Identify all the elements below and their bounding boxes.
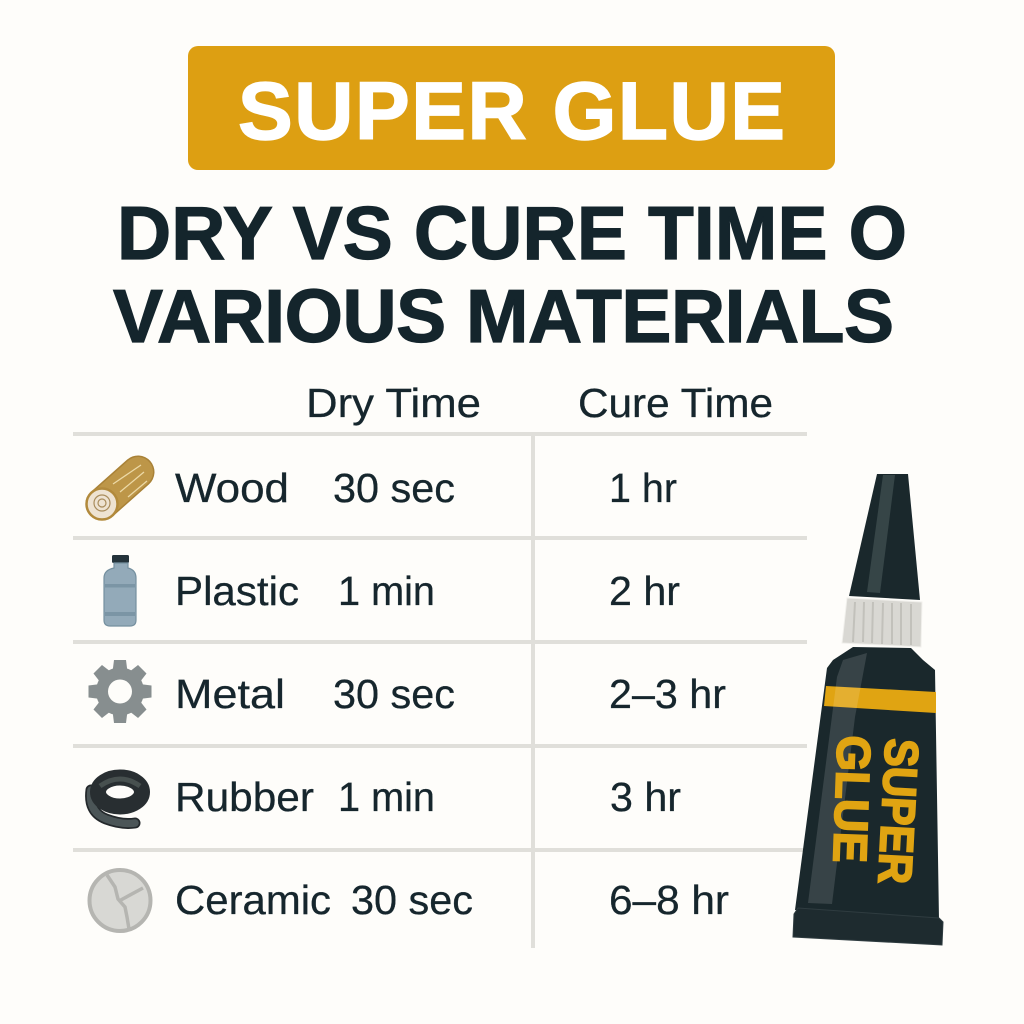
tube label: SUPER xyxy=(868,737,929,885)
row: wood: 1 hr xyxy=(609,465,677,511)
row: ceramic: 30 sec xyxy=(351,877,473,923)
tube crimp xyxy=(793,908,943,945)
row: wood: 30 sec xyxy=(333,465,455,511)
row: plastic xyxy=(104,555,680,626)
icon: rubber seal xyxy=(91,778,142,824)
icon: plastic bottle xyxy=(104,555,136,626)
heading: DRY VS CURE TIME O xyxy=(117,191,907,275)
title banner: SUPER GLUE xyxy=(238,66,785,157)
row: metal: 2–3 hr xyxy=(609,671,726,717)
tube label: GLUE xyxy=(824,735,881,863)
row: ceramic: Ceramic xyxy=(175,877,331,923)
tube band xyxy=(824,686,936,713)
row: ceramic xyxy=(90,870,729,931)
row: wood: Wood xyxy=(175,465,289,511)
column headers: Cure Time xyxy=(578,380,773,426)
title banner xyxy=(188,46,835,170)
row: rubber: 3 hr xyxy=(610,774,681,820)
table grid xyxy=(73,432,807,948)
icon: metal gear xyxy=(88,660,152,723)
icon: wood log xyxy=(86,465,147,520)
heading: VARIOUS MATERIALS xyxy=(113,274,894,358)
row: rubber xyxy=(91,774,681,824)
row: ceramic: 6–8 hr xyxy=(609,877,729,923)
row: wood xyxy=(86,465,677,520)
column headers: Dry Time xyxy=(306,380,481,426)
row: metal: 30 sec xyxy=(333,671,455,717)
column headers xyxy=(306,380,773,426)
row: plastic: 1 min xyxy=(338,568,435,614)
row: metal: Metal xyxy=(175,671,285,717)
icon: cracked ceramic xyxy=(90,870,150,931)
row: metal xyxy=(88,660,726,723)
row: plastic: 2 hr xyxy=(609,568,680,614)
row: rubber: 1 min xyxy=(338,774,435,820)
row: rubber: Rubber xyxy=(175,774,314,820)
tube nozzle xyxy=(849,474,920,600)
heading xyxy=(113,191,907,358)
tube label xyxy=(824,735,929,885)
tube highlight xyxy=(808,653,867,904)
tube body xyxy=(795,647,939,920)
tube cap xyxy=(842,598,922,647)
icon: glue tube xyxy=(793,474,943,945)
row: plastic: Plastic xyxy=(175,568,299,614)
